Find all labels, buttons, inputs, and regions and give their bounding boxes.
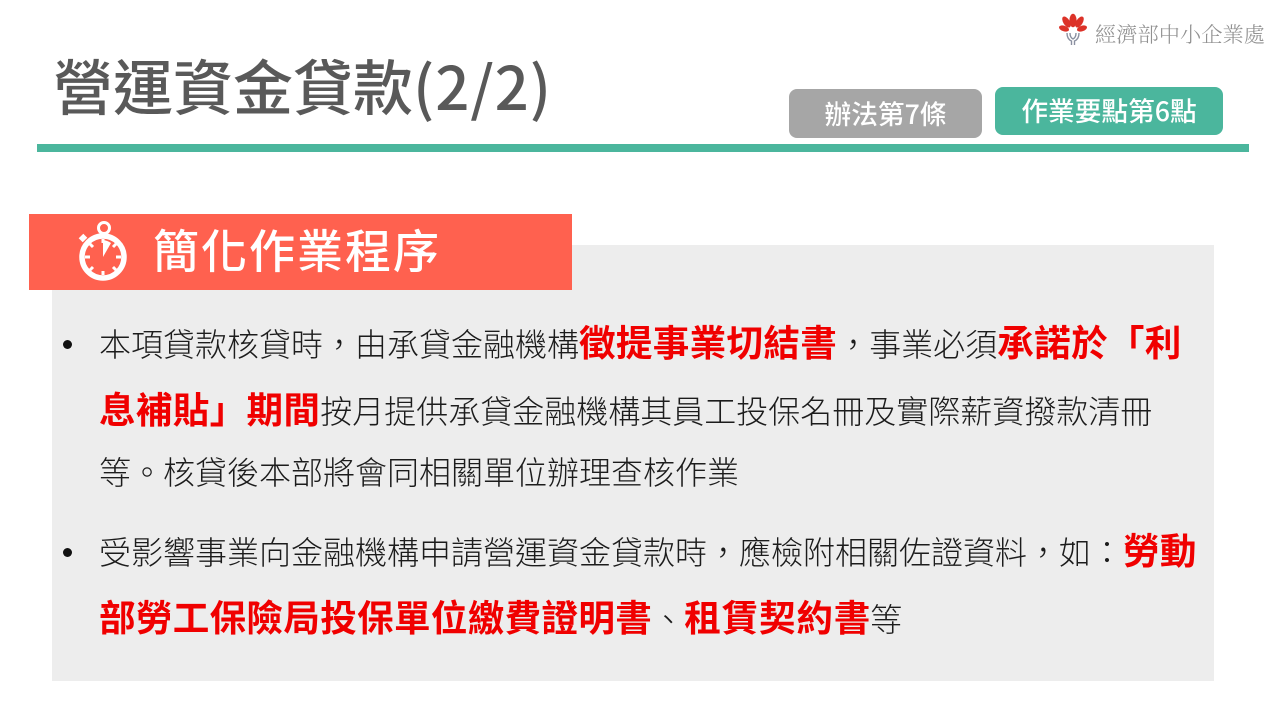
bullet 2 <box>63 548 72 557</box>
tag: regulation article 7: 辦法第7條 <box>825 93 946 132</box>
paragraph 1 line 3: 等。核貸後本部將會同相關單位辦理查核作業 <box>99 448 739 494</box>
panel: simplified procedure content <box>52 245 1214 681</box>
bullet 1 <box>63 340 72 349</box>
paragraph 1 line 1: 本項貸款核貸時，由承貸金融機構徵提事業切結書，事業必須承諾於「利 <box>99 314 1182 367</box>
paragraph 1 line 2: 息補貼」期間按月提供承貸金融機構其員工投保名冊及實際薪資撥款清冊 <box>99 381 1152 434</box>
icon: logo flower <box>1059 14 1087 45</box>
logo text: 經濟部中小企業處 <box>1095 19 1265 49</box>
title underline <box>37 144 1249 152</box>
logo: ministry SME administration <box>1059 14 1265 49</box>
heading text: 簡化作業程序 <box>153 216 441 282</box>
tag: operating directions point 6: 作業要點第6點 <box>1021 90 1197 129</box>
paragraph 2 line 1: 受影響事業向金融機構申請營運資金貸款時，應檢附相關佐證資料，如：勞動 <box>99 522 1197 575</box>
icon: stopwatch <box>78 221 127 281</box>
tag: operating directions point 6 <box>995 87 1223 135</box>
paragraph 2 line 2: 部勞工保險局投保單位繳費證明書、租賃契約書等 <box>99 589 902 642</box>
title: 營運資金貸款(2/2) <box>53 41 552 128</box>
heading banner: simplified procedure <box>29 214 572 290</box>
tag: regulation article 7 <box>789 89 982 138</box>
